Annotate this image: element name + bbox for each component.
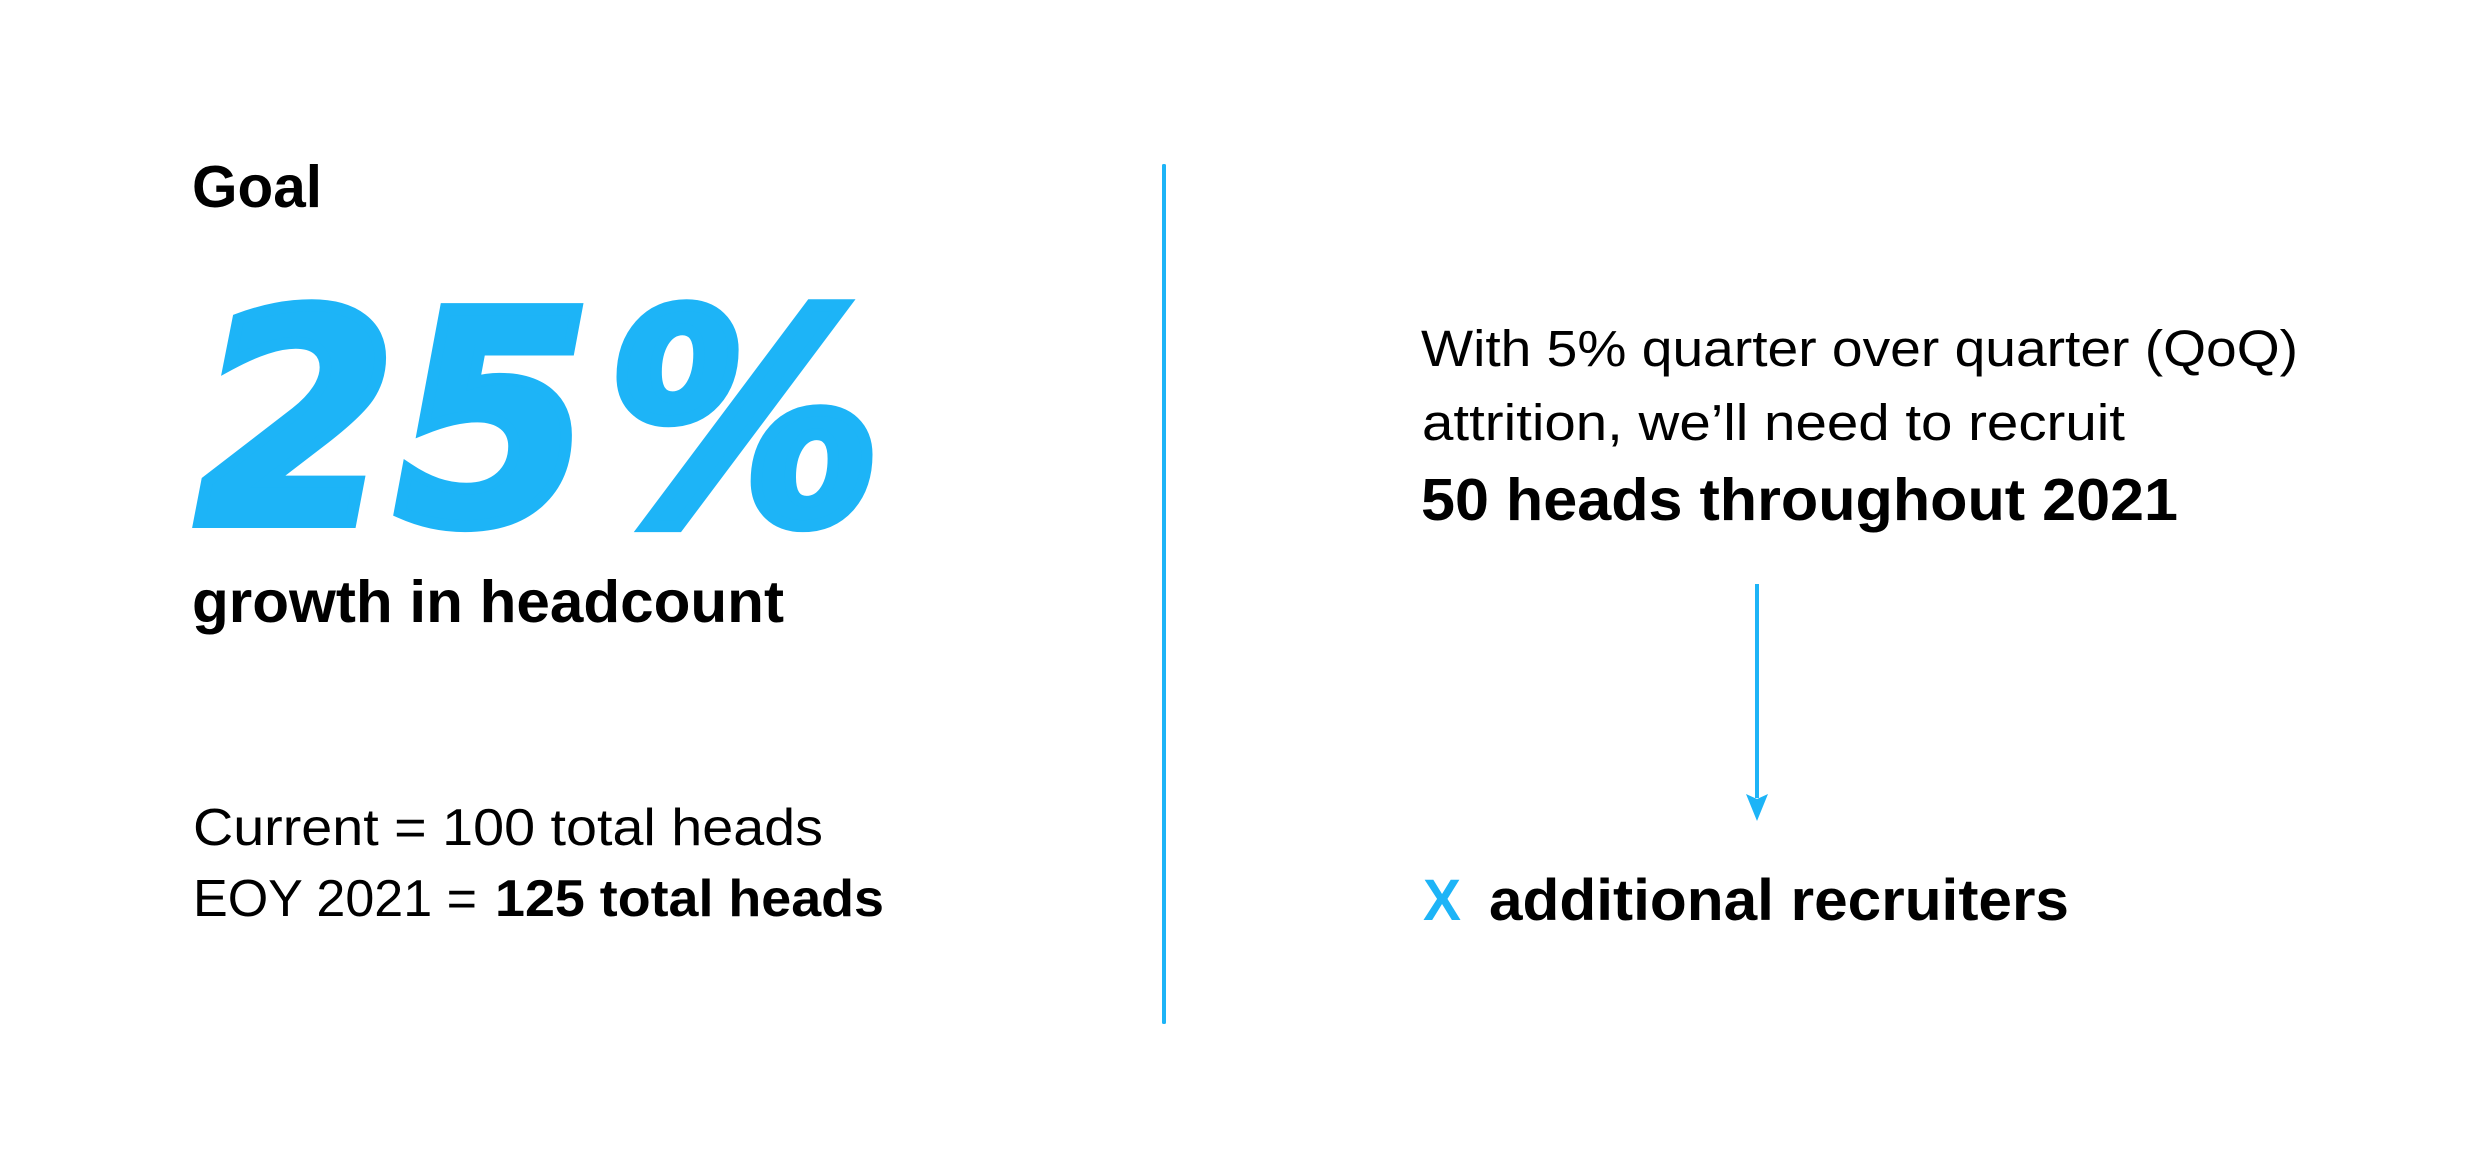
text: end of year headcount: EOY 2021 = <box>193 870 477 928</box>
panel: goal <box>192 154 884 928</box>
subheading: growth in headcount: growth in headcount <box>192 569 784 635</box>
result: additional recruiters: additional recruiters <box>1489 868 2069 933</box>
result: additional recruiters: X <box>1423 868 1461 933</box>
big number: 25%: % <box>607 251 882 591</box>
text: attrition explanation <box>1421 320 2298 451</box>
big number: 25%: 5 <box>396 252 591 591</box>
panel: recruiting need <box>1421 320 2298 933</box>
big number: 25% <box>197 251 882 592</box>
heading: Goal: Goal <box>192 154 322 220</box>
text: attrition explanation: With 5% quarter over quarter (QoQ) <box>1421 320 2298 377</box>
text: end of year headcount: 125 total heads <box>495 870 884 928</box>
text: current headcount: Current = 100 total heads <box>193 799 823 857</box>
text: 50 heads throughout 2021: 50 heads throughout 2021 <box>1421 467 2178 533</box>
arrow <box>1746 584 1768 821</box>
big number: 25%: 2 <box>197 252 396 592</box>
text: attrition explanation: attrition, we’ll need to recruit <box>1422 394 2125 451</box>
text: end of year headcount <box>193 870 884 928</box>
